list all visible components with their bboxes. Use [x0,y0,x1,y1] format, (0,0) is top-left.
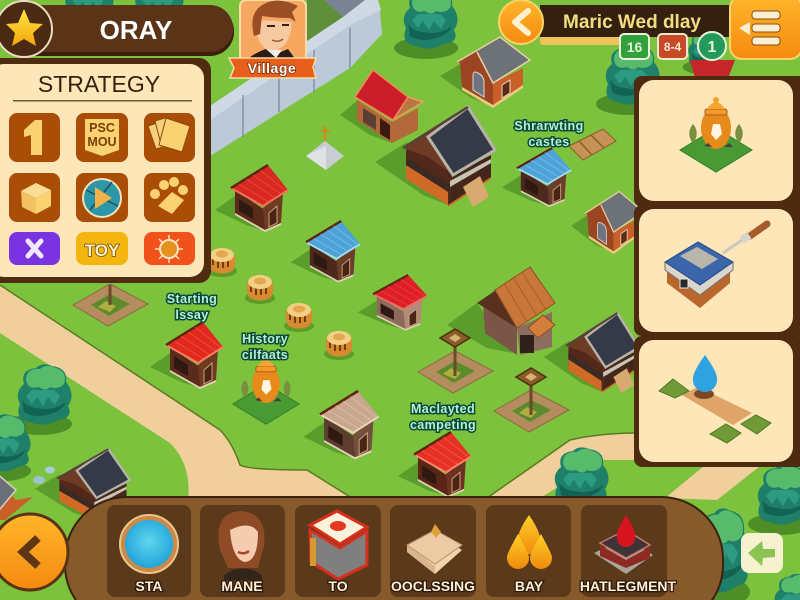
banner [229,58,316,78]
house: thatched roof [304,391,379,459]
box [667,270,730,308]
house: large dark roof centre [375,107,495,207]
top right status bar [540,5,735,45]
dirt path: left road [0,285,355,500]
tool: mane [200,505,285,597]
map label: maclayted campeting: campeting [410,418,476,432]
wooden pallet [569,129,616,160]
stones [33,466,55,484]
icon: back button top [499,0,543,44]
handle [723,238,745,253]
badge: green counter [620,34,649,59]
tile: psc mou: PSC [89,121,115,135]
bottom toolbar [65,497,723,600]
map label: starting lssay: lssay [175,308,209,322]
tool: hatlegment: HATLEGMENT [580,578,677,594]
badge: red counter: 8-4 [664,40,681,54]
signpost plot centre [418,329,493,393]
dirt path: right road [487,433,760,500]
map label: history ciltaats: cilfaats [242,348,288,362]
tool: sta [107,505,191,597]
red roof behind top bar [690,60,735,78]
house: red roof left [215,165,288,232]
house: red roof lower left [150,322,223,389]
badge: green counter: 16 [627,39,642,55]
tile: compass play [76,173,128,222]
house: wooden roof [447,267,555,355]
tool: to: TO [328,578,348,594]
tool: bay [486,505,571,597]
badge: green circle: 1 [708,39,717,56]
portrait body [246,49,296,60]
icon: green arrow button [741,533,783,573]
button: sun settings [144,232,195,265]
button: toy [76,232,128,265]
stone wall [207,0,382,158]
panel: strategy [0,58,211,283]
tool: sta: STA [136,578,162,594]
house: grey roof right [571,192,643,254]
panel: honey pot card [634,76,800,207]
panel: blue toolbox card [634,205,800,336]
tile: psc mou: MOU [87,135,117,149]
honey pot on map [233,355,299,424]
barrels [207,248,354,360]
button: toy: TOY [85,241,120,260]
badge: green circle [698,32,726,60]
strategy heading: STRATEGY [38,71,160,97]
house: grey roof top [440,37,530,108]
badge: red counter [658,34,687,59]
player title bar [12,5,234,56]
shrine [306,126,344,170]
icon: round back button bottom [0,514,68,590]
tool: ooclssing [390,505,476,597]
map label: starting lssay: Starting [167,292,217,306]
panel: water drop card [634,336,800,467]
tile: cards [144,113,195,162]
house: dark roof bottom left [35,449,130,521]
signpost plot right [494,368,569,432]
house: blue roof right [502,148,571,207]
garden plot left [73,284,148,326]
tool: to [295,505,381,597]
house: dark roof right [544,313,639,393]
character portrait with village banner: Village [248,60,296,76]
map label: history ciltaats: History [242,332,288,346]
tile: number one [9,113,60,162]
house: corner orange [0,472,33,520]
tool: ooclssing: OOCLSSING [391,578,475,594]
player name: ORAY [100,15,172,45]
house: wide red roof [340,70,423,143]
map label: shrarwting castes: castes [528,135,570,149]
house: blue roof centre [291,221,360,283]
house: red roof bottom [398,432,471,498]
tile: box [9,173,60,222]
tool: bay: BAY [515,578,544,594]
button: close [9,232,60,265]
tool: mane: MANE [221,578,263,594]
tile: paw [144,173,195,222]
tile: psc mou [76,113,128,162]
house: small red roof [358,275,427,331]
icon: menu button [730,0,800,59]
tool: hatlegment [580,505,677,597]
icon: star badge [0,1,52,57]
map label: maclayted campeting: Maclayted [411,402,475,416]
status title: Maric Wed dlay [563,12,701,33]
map label: shrarwting castes: Shrarwting [514,119,584,133]
character portrait with village banner [229,0,316,78]
